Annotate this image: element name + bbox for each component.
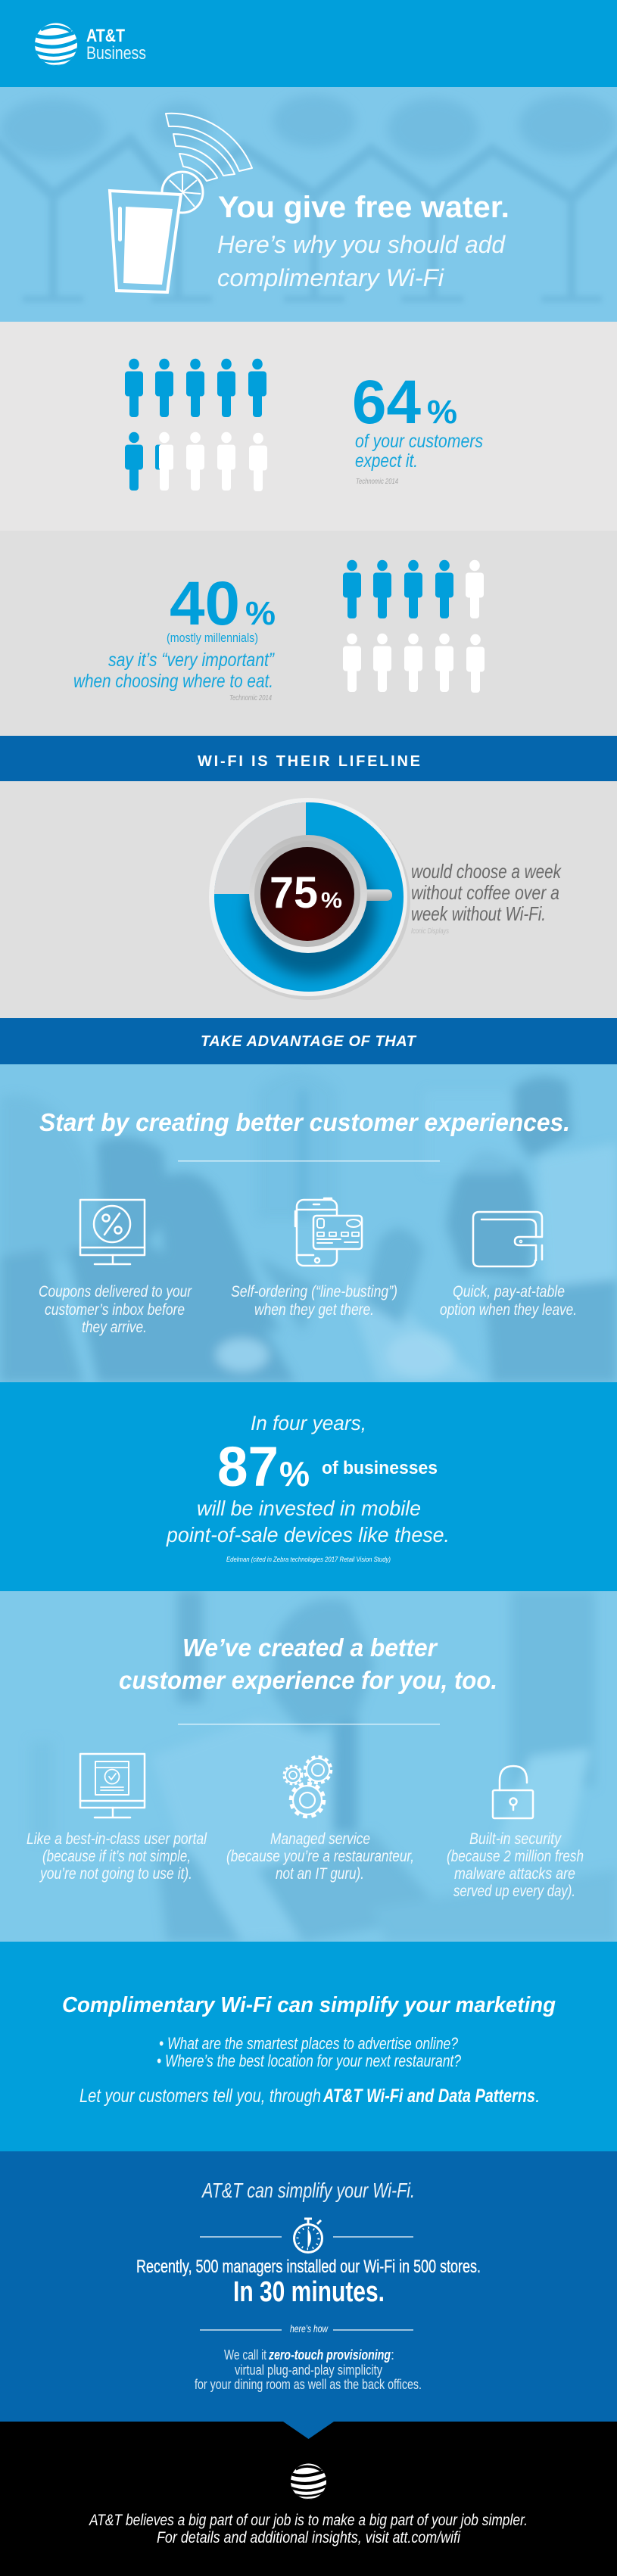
- stat description: [166, 1497, 450, 1547]
- panel: take advantage banner: [0, 1018, 617, 1064]
- bullet list: [157, 2034, 462, 2070]
- source: Edelman (cited in Zebra technologies 2017 Retail Vision Study): [226, 1556, 391, 1564]
- text: built-in security: [447, 1830, 584, 1900]
- stat description: [73, 631, 275, 692]
- panel: lifeline banner: [0, 736, 617, 781]
- text: pay at table: [440, 1283, 577, 1319]
- icon: people grid 64 percent: [125, 359, 267, 491]
- icon: people grid 40 percent: [343, 560, 485, 693]
- text: user portal: (because if it’s not simple,: [42, 1848, 191, 1865]
- source: Technomic 2014: [229, 694, 272, 702]
- heading: customer experience for you, too.: [119, 1666, 497, 1694]
- stat description: (mostly millennials): [167, 631, 258, 645]
- icon: wifi signal arcs: [166, 114, 252, 181]
- source: Iconic Displays: [411, 927, 449, 936]
- text: user portal: [26, 1830, 207, 1883]
- text: 500 managers: Recently, 500 managers installed our Wi-Fi in 500 stores.: [136, 2257, 481, 2277]
- text: zero-touch provisioning: virtual plug-and-play simplicity: [235, 2363, 382, 2378]
- text: self-ordering: [231, 1283, 397, 1319]
- heading: Start by creating better customer experiences.: [39, 1108, 570, 1136]
- icon: AT&T globe logo: [33, 23, 79, 66]
- text: coupons: Coupons delivered to your: [39, 1283, 192, 1300]
- text: zero-touch provisioning: [195, 2347, 422, 2392]
- text: pay at table: option when they leave.: [440, 1301, 577, 1319]
- stat number: [352, 368, 457, 437]
- title: You give free water.: [218, 191, 509, 224]
- text: built-in security: Built-in security: [469, 1830, 562, 1848]
- stat number: [217, 1435, 438, 1498]
- panel: footer: [0, 2422, 617, 2576]
- text: user portal: Like a best-in-class user portal: [26, 1830, 207, 1848]
- stat description: expect it.: [355, 450, 418, 472]
- icon: lemon slice: [162, 172, 203, 213]
- heading: We’ve created a better: [182, 1634, 438, 1662]
- text: managed service: not an IT guru).: [276, 1865, 364, 1883]
- text: built-in security: malware attacks are: [454, 1865, 575, 1883]
- source: Technomic 2014: [356, 478, 398, 486]
- stat description: week without Wi-Fi.: [411, 902, 546, 925]
- arrow: pointer into footer: [283, 2422, 334, 2439]
- text: built-in security: (because 2 million fresh: [447, 1848, 584, 1865]
- icon: phone with credit card: [295, 1198, 362, 1266]
- subtitle: [217, 231, 506, 291]
- panel: coffee stat: [0, 781, 617, 1018]
- stat number: [170, 569, 276, 638]
- stat number: of businesses: [322, 1458, 438, 1478]
- chart: coffee cup donut 75 percent: [209, 798, 410, 1000]
- icon: monitor with coupon: [80, 1200, 145, 1264]
- text: coupons: customer’s inbox before: [45, 1301, 185, 1319]
- brand name: Business: [86, 43, 146, 64]
- text: built-in security: served up every day).: [453, 1883, 575, 1900]
- icon: padlock: [493, 1766, 533, 1818]
- icon: water glass: [110, 191, 181, 292]
- stat number: 64: [352, 368, 421, 437]
- heading: [119, 1634, 497, 1694]
- bullet list: • Where’s the best location for your next restaurant?: [157, 2051, 462, 2070]
- text: managed service: (because you’re a restauranteur,: [226, 1848, 414, 1865]
- brand name: [86, 26, 146, 64]
- text: coupons: they arrive.: [82, 1319, 147, 1336]
- panel: 87 percent stat: [0, 1382, 617, 1591]
- panel: hero: [0, 87, 617, 322]
- icon: monitor with user portal: [80, 1754, 145, 1818]
- cup handle: [360, 889, 392, 901]
- stat description: [411, 860, 562, 925]
- text: pay at table: Quick, pay-at-table: [453, 1283, 565, 1300]
- icon: stopwatch: [294, 2219, 323, 2253]
- text: coupons: [39, 1283, 192, 1336]
- heading: TAKE ADVANTAGE OF THAT: [201, 1033, 417, 1050]
- background photo: wine glasses: [0, 95, 617, 299]
- text: zero-touch provisioning: zero-touch provisioning: [268, 2347, 391, 2363]
- text: AT&T Wi-Fi and Data Patterns: Let your customers tell you, through: [79, 2085, 321, 2107]
- brand name: AT&T: [86, 26, 125, 46]
- stat description: [355, 431, 483, 472]
- text: AT&T Wi-Fi and Data Patterns: [79, 2085, 541, 2107]
- icon: AT&T globe logo: [289, 2463, 328, 2500]
- stat description: would choose a week: [411, 860, 562, 883]
- background photo: person at laptop: [156, 1591, 612, 1942]
- stat number: 40: [170, 569, 240, 638]
- panel: simplify your marketing: [0, 1942, 617, 2151]
- text: user portal: you’re not going to use it).: [39, 1865, 192, 1883]
- text: here's how: here’s how: [290, 2322, 329, 2335]
- closing text: [88, 2512, 528, 2546]
- panel: header: [0, 0, 617, 87]
- stat description: point-of-sale devices like these.: [166, 1523, 450, 1547]
- panel: simplify your Wi-Fi: [0, 2151, 617, 2422]
- stat number: [270, 868, 342, 917]
- panel: better experience for you: [0, 1590, 617, 1942]
- text: self-ordering: Self-ordering (“line-busting”): [231, 1283, 397, 1300]
- text: AT&T Wi-Fi and Data Patterns: AT&T Wi-Fi and Data Patterns: [323, 2085, 535, 2107]
- icon: gears: [284, 1756, 332, 1817]
- panel: 40 percent stat: [0, 531, 617, 736]
- panel: 64 percent stat: [0, 322, 617, 531]
- text: zero-touch provisioning: We call it: [224, 2347, 266, 2363]
- stat description: of your customers: [355, 431, 483, 452]
- heading: Complimentary Wi-Fi can simplify your marketing: [62, 1993, 556, 2017]
- text: managed service: [226, 1830, 414, 1883]
- closing text: For details and additional insights, visit att.com/wifi: [157, 2529, 461, 2546]
- icon: wallet: [473, 1212, 542, 1266]
- text: managed service: Managed service: [270, 1830, 370, 1848]
- background photo: restaurant diners: [0, 1071, 617, 1382]
- stat description: when choosing where to eat.: [73, 671, 273, 692]
- bullet list: • What are the smartest places to advertise online?: [159, 2034, 459, 2053]
- text: in four years: In four years,: [251, 1412, 366, 1434]
- stat number: %: [427, 394, 457, 431]
- stat description: without coffee over a: [411, 881, 559, 904]
- panel: better customer experiences: [0, 1064, 617, 1382]
- text: AT&T Wi-Fi and Data Patterns: .: [535, 2085, 541, 2107]
- heading: WI-FI IS THEIR LIFELINE: [198, 753, 420, 770]
- subtitle: complimentary Wi-Fi: [217, 264, 444, 291]
- stat number: 75: [270, 868, 318, 917]
- stat description: say it’s “very important”: [108, 649, 275, 671]
- stat: in 30 minutes: In 30 minutes.: [233, 2276, 385, 2308]
- text: self-ordering: when they get there.: [254, 1301, 374, 1319]
- stat number: %: [321, 889, 342, 913]
- stat number: %: [245, 595, 276, 632]
- stat number: 87: [217, 1435, 279, 1498]
- closing text: AT&T believes a big part of our job is to make a big part of your job simpler.: [88, 2512, 528, 2529]
- stat number: %: [279, 1454, 310, 1494]
- heading: AT&T can simplify your Wi-Fi.: [201, 2179, 415, 2202]
- text: zero-touch provisioning: for your dining room as well as the back offices.: [195, 2377, 422, 2392]
- text: zero-touch provisioning: :: [391, 2347, 394, 2363]
- subtitle: Here’s why you should add: [217, 231, 506, 258]
- stat description: will be invested in mobile: [197, 1497, 421, 1520]
